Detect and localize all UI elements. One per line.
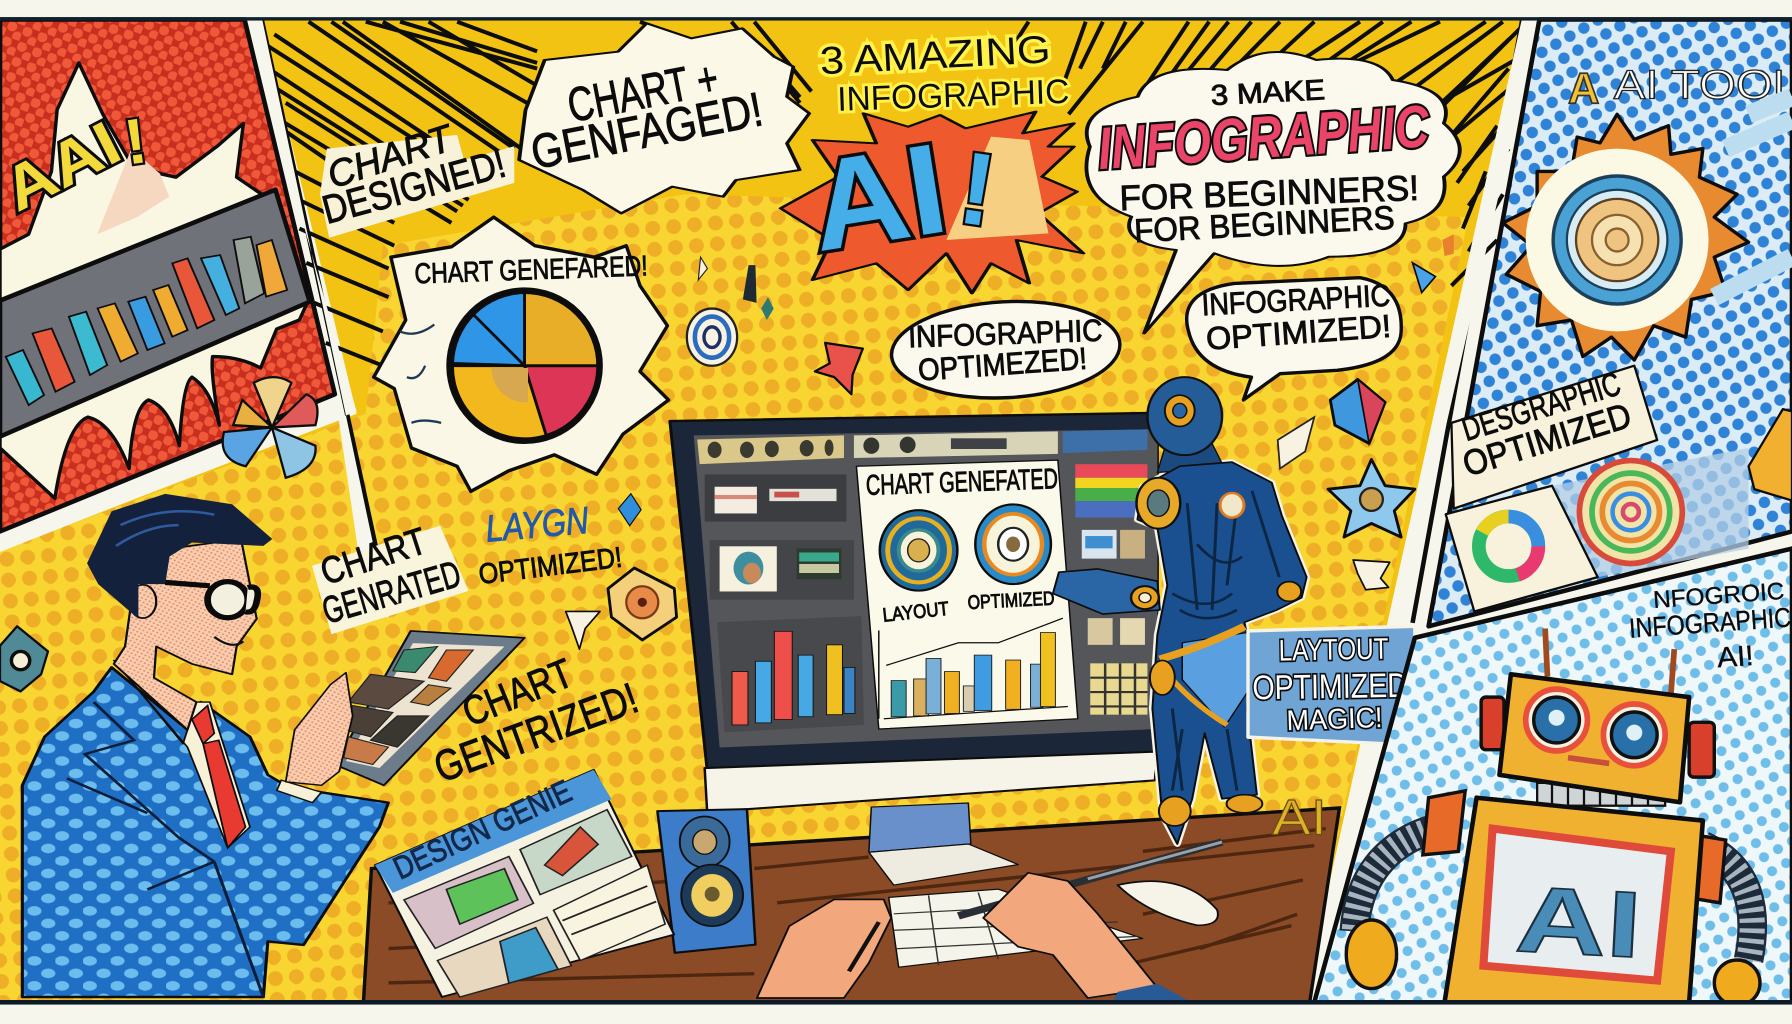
white zigzag burst below chart [0, 297, 310, 498]
robot antennas [1545, 629, 1674, 695]
title: INFOGRAPHIC [837, 73, 1070, 119]
speech burst: chart genfaged: GENFAGED! [527, 83, 767, 180]
caption: chart genrated: GENRATED [317, 552, 465, 632]
sleeve [1113, 984, 1187, 1002]
monitor with dashboard screen: OPTIMIZED [967, 588, 1055, 614]
robot hands [1346, 920, 1760, 1006]
icon: blue gem [1330, 379, 1385, 443]
oval bubble: infographic optimezed: OPTIMEZED! [917, 341, 1088, 388]
robot head [1499, 674, 1689, 802]
cloud speech bubble: make infographic: FOR BEGINNERS [1133, 200, 1395, 250]
shirt [114, 660, 250, 848]
pie chart [449, 290, 600, 441]
icon: orange star [1749, 409, 1792, 501]
caption: laygn optimized: OPTIMIZED! [477, 542, 624, 591]
cloud speech bubble: make infographic: INFOGRAPHIC [1096, 92, 1432, 182]
white burst with AAI: ! [120, 104, 151, 178]
tag: layout optimized magic: OPTIMIZED [1252, 667, 1408, 707]
label: desgraphic optimized [1451, 366, 1657, 509]
monitor with dashboard screen: LAYOUT [882, 598, 950, 627]
decorative icons in yellow field [0, 234, 1454, 691]
tablet and hand [286, 631, 525, 785]
stylus pen [958, 842, 1222, 916]
panel: bottom-right robot panel [1314, 549, 1792, 1006]
caption: infographic AI [1628, 578, 1792, 674]
robot body with AI screen: AI [1513, 866, 1644, 977]
mouse [1118, 881, 1218, 925]
keyboard [889, 889, 1142, 967]
tie [192, 706, 246, 848]
right side widgets [1075, 464, 1147, 715]
monitor with dashboard screen: CHART GENEFATED [865, 463, 1058, 502]
humanoid robot figure [1053, 377, 1307, 844]
businessman figure [22, 494, 388, 997]
caption: laygn optimized: LAYGN [484, 499, 591, 550]
icon: red star shard [815, 343, 863, 394]
oval bubble: infographic optimezed [889, 296, 1122, 404]
caption: chart designed: CHART [322, 116, 460, 196]
monitor with dashboard screen [670, 413, 1157, 885]
bubble: infographic optimized [1187, 278, 1401, 400]
chart burst with pie chart: CHART GENEFARED! [414, 250, 648, 290]
icon: spiral medallion [687, 309, 737, 366]
speech burst: chart genfaged [519, 23, 809, 213]
suit [22, 667, 388, 997]
bar chart panel [0, 190, 310, 437]
right hand [983, 873, 1157, 998]
icon: white sparkles [1353, 560, 1390, 590]
light blue streaks [1714, 97, 1792, 297]
card with color ring [1446, 486, 1598, 611]
caption: chart designed: DESIGNED! [318, 142, 510, 233]
cloud speech bubble: make infographic [1086, 52, 1460, 333]
keyboard, mouse and hands [757, 842, 1222, 1002]
caption: infographic AI: NFOGROIC [1652, 578, 1785, 614]
bubble: infographic optimized: INFOGRAPHIC [1201, 278, 1391, 322]
neck [1157, 444, 1225, 472]
robot body with AI screen [1445, 798, 1703, 1002]
tag: layout optimized magic [1248, 626, 1415, 745]
panel: top-left red comic panel [0, 19, 335, 531]
glasses [165, 582, 258, 618]
robot springs arms [1354, 829, 1752, 960]
speaker [657, 809, 755, 953]
robot ears [1481, 697, 1714, 777]
white chart document [856, 460, 1078, 729]
title: 3 AMAZING [819, 28, 1052, 83]
head [114, 539, 257, 730]
smile [214, 637, 243, 645]
left hand [757, 899, 891, 998]
monitor stand [869, 803, 1018, 885]
AI explosion burst [781, 112, 1084, 293]
speech burst: chart genfaged: CHART + [563, 52, 723, 133]
icon: left wall gem [0, 626, 48, 691]
heading: AI tools: A [1568, 65, 1599, 113]
caption: laygn optimized [477, 499, 624, 591]
newspaper: design genie [375, 770, 674, 997]
robot shoulders [1423, 791, 1726, 903]
cloud speech bubble: make infographic: FOR BEGINNERS! [1119, 168, 1420, 218]
hair [87, 494, 272, 619]
caption: chart gentrized: GENTRIZED! [428, 674, 644, 792]
chart burst with pie chart [374, 217, 669, 491]
rainbow spiral [1579, 461, 1682, 563]
label: desgraphic optimized: OPTIMIZED [1458, 395, 1636, 484]
tag: layout optimized magic: MAGIC! [1286, 702, 1383, 737]
icon: small pie flower chart [223, 377, 317, 478]
caption: chart genrated [312, 519, 469, 634]
AI explosion burst: ! [952, 130, 1002, 248]
AI explosion burst: AI [800, 117, 956, 279]
hand [286, 673, 353, 785]
cuff [277, 780, 321, 803]
newspaper: design genie: DESIGN GENIE [388, 773, 577, 886]
caption: chart gentrized: CHART [456, 650, 579, 735]
tag: layout optimized magic: LAYTOUT [1278, 633, 1389, 668]
caption: chart genrated: CHART [315, 519, 431, 593]
icon: orange target gem [608, 568, 677, 640]
label: desgraphic optimized: DESGRAPHIC [1458, 366, 1625, 449]
white burst with AAI [0, 63, 265, 314]
desk [363, 808, 1339, 1002]
sunburst with concentric circles [1503, 114, 1749, 360]
panel: top-right blue comic panel [1429, 19, 1792, 626]
icon: pale blue star [1328, 459, 1415, 537]
title [819, 28, 1070, 119]
ear [129, 585, 156, 618]
caption: infographic AI: AI! [1716, 640, 1755, 674]
robot neck [1537, 783, 1665, 806]
cloud speech bubble: make infographic: 3 MAKE [1210, 74, 1326, 112]
bubble: infographic optimized: OPTIMIZED! [1205, 308, 1392, 357]
oval bubble: infographic optimezed: INFOGRAPHIC [908, 313, 1103, 354]
muted chart backdrop [1552, 448, 1749, 577]
label: AI gold: AI [1272, 788, 1327, 845]
